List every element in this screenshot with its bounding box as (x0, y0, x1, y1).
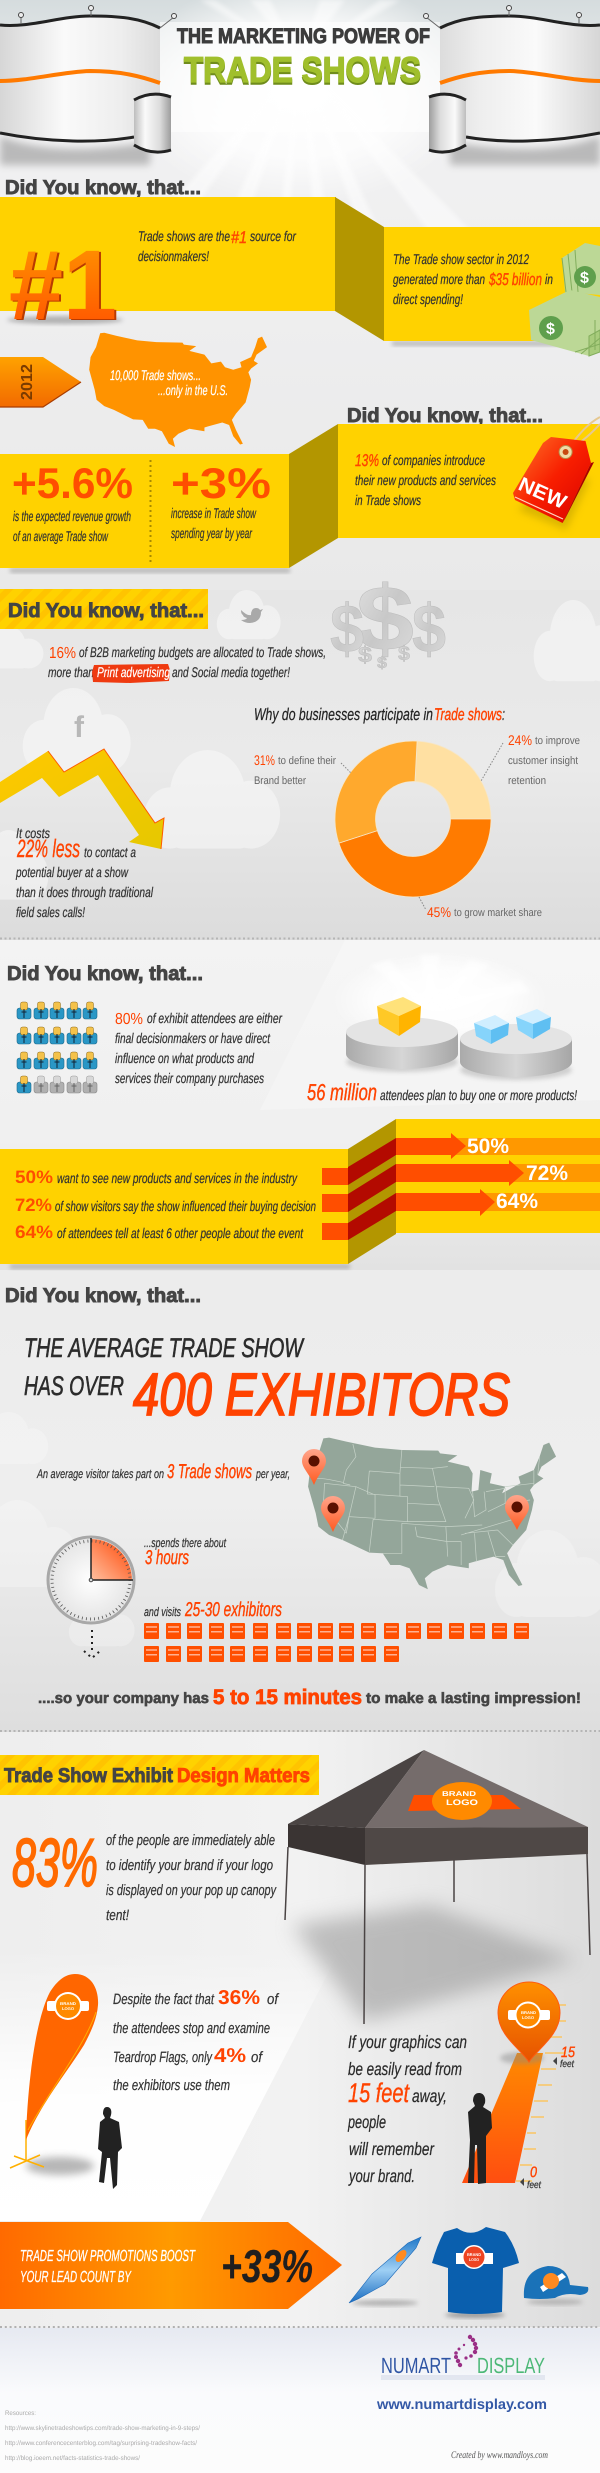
text: 35 billion spending: The Trade show sector in 2012 (393, 251, 529, 267)
text: 35 billion spending (393, 251, 553, 307)
icon: dollar signs: $ (412, 591, 446, 667)
arrow: promotions boost lead count: +33% (221, 2240, 313, 2292)
text: 25 to 30 exhibitors: 25-30 exhibitors (184, 1599, 282, 1621)
stat: 83 percent (12, 1825, 277, 1924)
text: 25 to 30 exhibitors: and visits (144, 1605, 181, 1619)
icon: dollar signs: $ (330, 591, 364, 667)
illustration: teardrop flag (10, 1974, 98, 2175)
heading: did you know 2: Did You know, that... (347, 405, 543, 427)
text: three hours: 3 hours (145, 1547, 189, 1569)
resources: http://www.skylinetradeshowtips.com/trade-show-marketing-in-9-steps/ (5, 2425, 200, 2432)
chart label: 24 percent: 24% (508, 732, 532, 748)
stat: 83 percent: is displayed on your pop up canopy (106, 1882, 277, 1899)
heading banner: did you know 3: Did You know, that... (8, 600, 204, 622)
text: 80 percent of attendees: influence on what products and (115, 1050, 255, 1066)
text: teardrop flag statistics: Teardrop Flags, only (113, 2049, 213, 2066)
stat: 83 percent: of the people are immediately able (106, 1832, 275, 1849)
text: 16 percent of budgets: more than (48, 664, 94, 680)
panel: new products band (338, 417, 600, 538)
text: number one source: source for (250, 228, 297, 244)
icon grid: 80 percent of attendees (17, 1002, 97, 1093)
headline: 400 exhibitors (24, 1333, 510, 1428)
icon: map pin east (505, 1495, 529, 1530)
icon: stacks of money (529, 243, 600, 356)
icon: big number one: #1 (9, 229, 117, 340)
callout: five to fifteen minutes: 5 to 15 minutes (213, 1686, 362, 1709)
highlight: print advertising (92, 664, 170, 683)
text: three trade shows per year: per year, (255, 1467, 290, 1481)
highlight: print advertising: Print advertising (97, 664, 170, 680)
text: 16 percent of budgets: and Social media together! (172, 664, 290, 680)
text: 22 percent less (15, 825, 154, 920)
heading banner: did you know 3 (0, 589, 208, 629)
icon: dollar signs: $ (356, 568, 414, 670)
decorative clouds: budget section (0, 590, 600, 900)
stat: plus 5.6 percent: is the expected revenue growth (13, 508, 131, 524)
title: TRADE SHOWS (184, 51, 421, 92)
resources: http://www.conferencecenterblog.com/tag/surprising-tradeshow-facts/ (5, 2440, 197, 2447)
text: three trade shows per year: 3 Trade shows (167, 1461, 252, 1483)
text: 64 percent: 64% (15, 1222, 53, 1242)
chart label: 31 percent (254, 752, 351, 787)
text: fifteen feet graphics: be easily read from (348, 2059, 462, 2079)
text: 80 percent of attendees: 80% (115, 1011, 143, 1028)
arrow: 50 percent bar: 50% (467, 1135, 509, 1158)
icon: dollar signs (330, 568, 446, 672)
icon: stacks of money: $ (546, 321, 555, 338)
text: three trade shows per year (36, 1461, 290, 1483)
icon: clock with three hours wedge (48, 1537, 134, 1623)
text: teardrop flag statistics: the attendees stop and examine (113, 2020, 270, 2037)
icon: new price tag: NEW (515, 473, 570, 514)
text: three hours: ...spends there about (144, 1536, 226, 1550)
arrow: 2012: 2012 (19, 364, 36, 400)
arrow: 64 percent bar (322, 1189, 538, 1240)
stat: plus 3 percent: +3% (171, 460, 271, 508)
resources (5, 2410, 200, 2462)
banner: right curtain (424, 6, 600, 165)
text: number one source: #1 (231, 228, 247, 247)
chart label: 24 percent: customer insight (508, 755, 578, 767)
heading: did you know 1: Did You know, that... (5, 177, 201, 199)
text: 72 percent: of show visitors say the show influenced their buying decision (55, 1198, 316, 1214)
text: 22 percent less: 22% less (16, 835, 80, 863)
text: 16 percent of budgets (48, 644, 326, 683)
illustration: teardrop flag: BRAND (60, 2001, 76, 2006)
stat: 83 percent: tent! (106, 1907, 130, 1924)
stat: plus 3 percent: spending year by year (171, 525, 253, 541)
arrow: 2012 (0, 357, 81, 407)
arrow: promotions boost lead count: TRADE SHOW PROMOTIONS BOOST (20, 2248, 196, 2265)
heading: why businesses participate: : (502, 705, 505, 724)
logo: numart display: DISPLAY (477, 2353, 545, 2378)
icon: stacks of money: $ (580, 270, 589, 287)
text: 22 percent less: than it does through traditional (16, 884, 154, 900)
arrow: 72 percent bar (322, 1160, 568, 1212)
chart label: 24 percent: retention (508, 775, 546, 787)
ruler label: 15 feet: 15 (561, 2044, 576, 2061)
text: fifteen feet graphics (347, 2032, 467, 2186)
illustration: tall flag with height ruler: BRAND (521, 2010, 536, 2015)
heading banner: design matters: Design Matters (177, 1765, 310, 1787)
icon: promotional cap (524, 2266, 588, 2305)
callout: five to fifteen minutes: to make a lasting impression! (366, 1690, 581, 1707)
text: 35 billion spending: in (545, 271, 553, 287)
text: 13 percent of companies: in Trade shows (355, 492, 421, 508)
icon: map pin west (302, 1449, 326, 1485)
text: three hours (144, 1536, 226, 1569)
illustration: canopy tent with brand logo (285, 1750, 590, 2024)
text: 22 percent less: field sales calls! (16, 904, 85, 920)
text: 64 percent (15, 1222, 304, 1242)
stat: 83 percent: 83% (12, 1825, 98, 1901)
heading: why businesses participate: Why do businesses participate in (254, 705, 433, 724)
text: 50 percent: want to see new products and services in the industry (57, 1170, 298, 1186)
illustration: podiums with product boxes (330, 950, 572, 1080)
text: number one source: Trade shows are the (138, 228, 230, 244)
heading: why businesses participate: Trade shows (434, 705, 502, 724)
chart label: 31 percent: 31% (254, 752, 275, 768)
chart label: 24 percent (481, 732, 580, 787)
chart: donut of reasons to participate (335, 741, 491, 897)
resources: http://blog.ioeem.net/facts-statistics-trade-shows/ (5, 2455, 140, 2462)
icon: dollar signs: $ (398, 643, 410, 665)
text: 13 percent of companies (355, 451, 496, 508)
tent logo: LOGO (446, 1798, 478, 1807)
text: fifteen feet graphics: 15 feet (348, 2078, 410, 2108)
chart label: 45 percent: 45% (427, 904, 451, 920)
heading: did you know 4: Did You know, that... (7, 963, 203, 985)
text: 50 percent (15, 1167, 298, 1187)
text: teardrop flag statistics: Despite the fact that (113, 1991, 215, 2008)
text: 13 percent of companies: their new products and services (355, 472, 496, 488)
text: fifteen feet graphics: your brand. (348, 2166, 415, 2186)
text: teardrop flag statistics: of (251, 2049, 264, 2066)
panel: number one source band (0, 197, 600, 356)
text: 22 percent less: potential buyer at a show (15, 864, 129, 880)
text: 13 percent of companies: of companies introduce (382, 452, 485, 468)
callout: five to fifteen minutes: ....so your company has (38, 1690, 209, 1707)
ruler label: 15 feet (553, 2044, 576, 2070)
text: 72 percent: 72% (15, 1195, 52, 1215)
arrow: 50 percent bar (322, 1133, 509, 1185)
panel: attendee intent band (0, 1119, 600, 1269)
text: 56 million attendees (307, 1079, 577, 1105)
text: 22 percent less: It costs (16, 825, 50, 841)
text: 16 percent of budgets: of B2B marketing budgets are allocated to Trade shows, (79, 644, 326, 660)
text: number one source: decisionmakers! (138, 248, 209, 264)
text: 25 to 30 exhibitors (144, 1599, 282, 1621)
icon: twitter bird (241, 608, 263, 623)
text: 80 percent of attendees: of exhibit attendees are either (147, 1010, 283, 1026)
tent logo: BRAND (442, 1791, 476, 1798)
text: 50 percent: 50% (15, 1167, 53, 1187)
headline: 400 exhibitors: HAS OVER (24, 1371, 124, 1401)
text: 80 percent of attendees: services their company purchases (115, 1070, 264, 1086)
title: THE MARKETING POWER OF (177, 25, 430, 48)
icon: man silhouette near tall flag (468, 2093, 492, 2184)
text: 72 percent (15, 1195, 316, 1215)
arrow: 64 percent bar: 64% (496, 1190, 538, 1213)
text: 13 percent of companies: 13% (355, 451, 379, 470)
headline: 400 exhibitors: THE AVERAGE TRADE SHOW (24, 1333, 305, 1363)
stat: plus 5.6 percent: +5.6% (12, 460, 133, 508)
text: 10,000 trade shows: ...only in the U.S. (158, 382, 228, 398)
icon: dollar signs: $ (377, 655, 387, 672)
map: grey United States with pins (302, 1438, 556, 1589)
panel: revenue growth band (0, 424, 338, 573)
icon: dollar signs: $ (358, 642, 372, 667)
callout: five to fifteen minutes (38, 1686, 581, 1709)
banner: left curtain (0, 6, 176, 165)
text: 10,000 trade shows (110, 367, 228, 398)
text: teardrop flag statistics: 4% (214, 2045, 246, 2067)
chart label: 31 percent: Brand better (254, 775, 306, 787)
ruler label: 0 feet: 0 (530, 2164, 538, 2181)
arrow: 72 percent bar: 72% (526, 1162, 568, 1185)
text: 10,000 trade shows: 10,000 Trade shows... (110, 367, 201, 383)
chart label: 24 percent: to improve (535, 735, 580, 747)
text: teardrop flag statistics: of (267, 1991, 280, 2008)
text: fifteen feet graphics: people (347, 2112, 386, 2132)
arrow: promotions boost lead count (0, 2222, 342, 2309)
text: 64 percent: of attendees tell at least 6 other people about the event (57, 1225, 304, 1241)
icon: new price tag (513, 417, 600, 530)
text: fifteen feet graphics: will remember (349, 2139, 435, 2159)
ruler label: 15 feet: feet (560, 2059, 575, 2070)
ruler label: 0 feet: feet (527, 2180, 542, 2191)
text: 56 million attendees: 56 million (307, 1079, 377, 1105)
resources: Resources: (5, 2410, 36, 2417)
icon: promotional t-shirt (432, 2227, 519, 2318)
text: three trade shows per year: An average visitor takes part on (36, 1467, 164, 1481)
text: 22 percent less: to contact a (84, 844, 136, 860)
icon: man silhouette near flag (98, 2107, 122, 2189)
heading: did you know 5: Did You know, that... (5, 1285, 201, 1307)
stat: plus 5.6 percent: of an average Trade show (13, 528, 109, 544)
text: 80 percent of attendees (115, 1010, 283, 1086)
text: teardrop flag statistics (113, 1987, 280, 2094)
logo: numart display: NUMART (381, 2353, 451, 2378)
heading banner: design matters (0, 1755, 319, 1795)
map: orange United States (89, 333, 267, 447)
text: 35 billion spending: $35 billion (488, 270, 542, 289)
chart label: 45 percent (419, 897, 542, 920)
icon: big number one: #1 (11, 230, 119, 341)
heading banner: design matters: Trade Show Exhibit (4, 1765, 173, 1787)
stat: plus 5.6 percent (12, 460, 133, 544)
illustration: teardrop flag: LOGO (62, 2006, 74, 2011)
icon: dotted down arrow (84, 1630, 100, 1658)
icon: promotional t-shirt: LOGO (469, 2257, 479, 2262)
text: 16 percent of budgets: 16% (49, 645, 76, 662)
title: TRADE SHOWS (184, 49, 421, 90)
headline: 400 exhibitors: 400 EXHIBITORS (133, 1361, 510, 1428)
text: teardrop flag statistics: the exhibitors use them (113, 2077, 230, 2094)
website url: www.numartdisplay.com (376, 2397, 547, 2413)
title (177, 25, 430, 92)
stat: plus 3 percent (171, 460, 271, 541)
text: number one source (138, 228, 297, 264)
text: 35 billion spending: direct spending! (393, 291, 463, 307)
icon: facebook f: f (74, 711, 85, 744)
arrow: promotions boost lead count: YOUR LEAD COUNT BY (20, 2269, 132, 2286)
illustration: tall flag with height ruler (462, 1982, 576, 2191)
text: teardrop flag statistics: 36% (218, 1987, 260, 2009)
arrow: declining cost zigzag (0, 749, 164, 849)
logo: numart display (381, 2335, 545, 2380)
chart label: 45 percent: to grow market share (454, 907, 542, 919)
icon: map pin southwest (321, 1496, 345, 1532)
icon: promotional pen (349, 2237, 421, 2306)
ruler label: 0 feet (520, 2164, 542, 2191)
chart label: 31 percent: to define their (278, 755, 336, 767)
text: fifteen feet graphics: If your graphics can (348, 2032, 467, 2052)
stat: plus 3 percent: increase in Trade show (171, 505, 257, 521)
tent logo (408, 1782, 521, 1820)
text: fifteen feet graphics: away, (412, 2086, 447, 2106)
spotlight rays behind title (120, 0, 480, 290)
decorative clouds: exhibitors section (0, 1412, 600, 1646)
text: 35 billion spending: generated more than (393, 271, 485, 287)
icon row: exhibitor booths (144, 1623, 529, 1662)
text: 80 percent of attendees: final decisionmakers or have direct (115, 1030, 271, 1046)
illustration: tall flag with height ruler: LOGO (522, 2015, 534, 2020)
stat: 83 percent: to identify your brand if your logo (106, 1857, 273, 1874)
credit: created by: Created by www.mandloys.com (451, 2450, 548, 2461)
icon: promotional t-shirt: BRAND (467, 2252, 481, 2257)
